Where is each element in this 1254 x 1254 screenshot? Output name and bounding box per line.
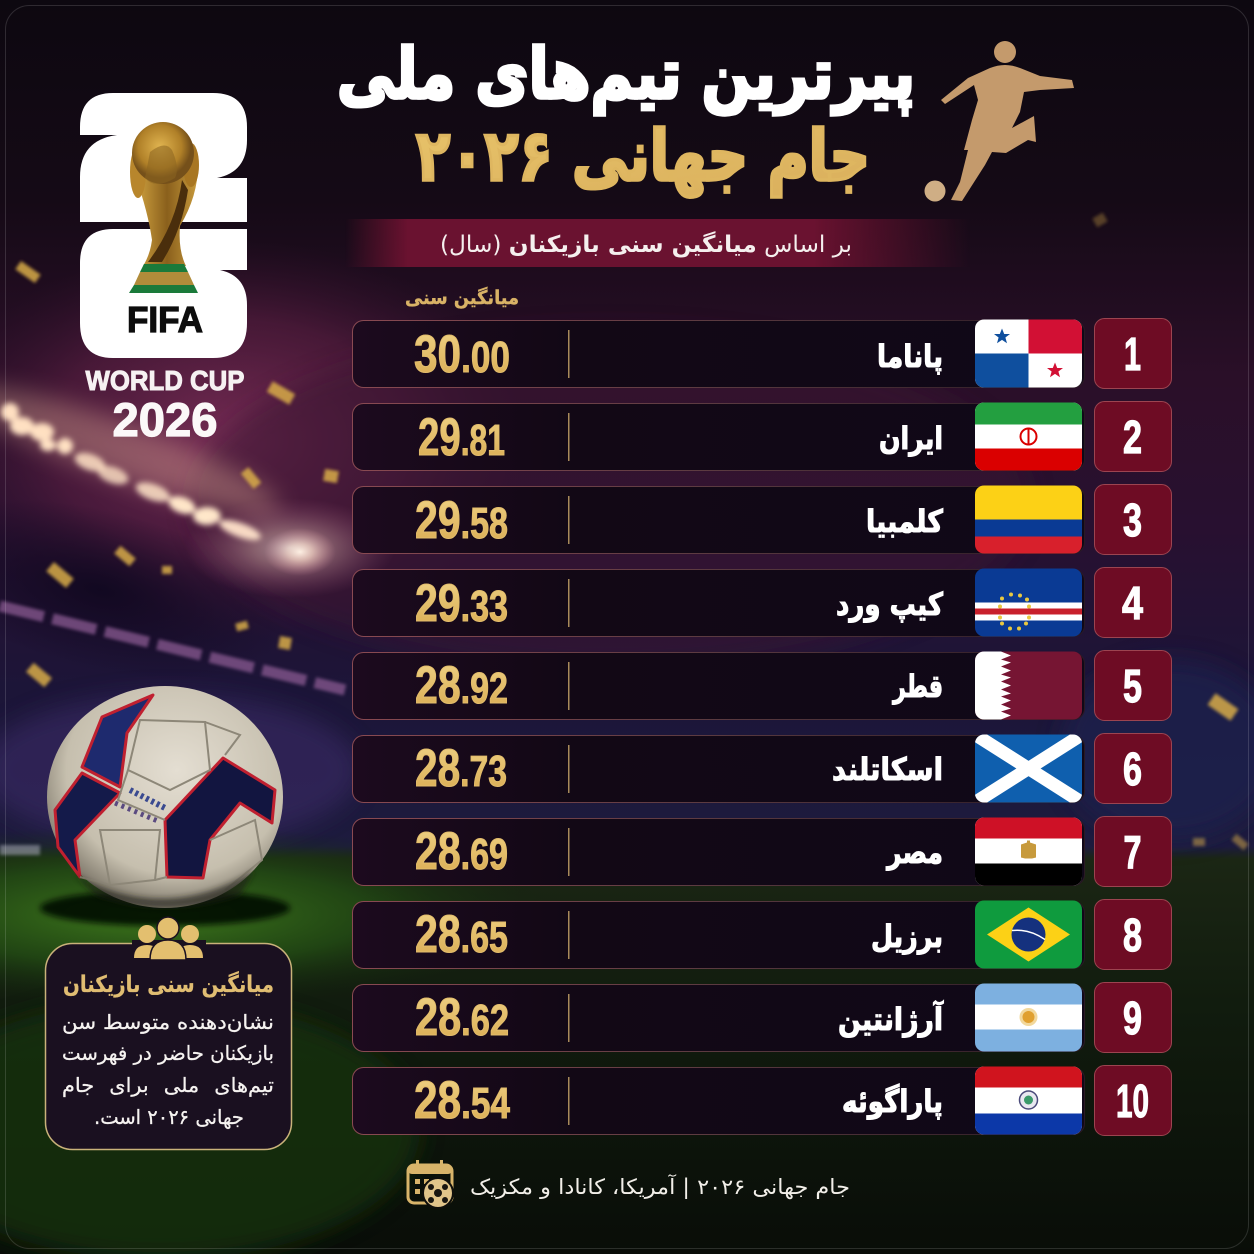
icon: football player silhouette <box>924 41 1074 202</box>
flag: Colombia <box>975 486 1082 554</box>
rank badge: 9 <box>1123 992 1142 1044</box>
value: 29.33 <box>415 574 508 633</box>
digit 6 <box>80 229 247 358</box>
country name: پاراگوئه <box>842 1083 943 1120</box>
value: 28.92 <box>415 656 508 715</box>
flag: Scotland <box>975 734 1082 802</box>
rank badge: 8 <box>1123 909 1142 961</box>
flag: Brazil <box>975 900 1082 968</box>
flag: Qatar <box>975 652 1082 720</box>
rank badge <box>1094 900 1172 970</box>
country name: اسکاتلند <box>832 752 943 788</box>
country name: کلمبیا <box>866 504 944 540</box>
rank badge <box>1094 734 1172 804</box>
row 3: Colombia <box>352 484 1172 554</box>
icon: calendar with ball <box>408 1160 453 1208</box>
title line 2: جام جهانی ۲۰۲۶ <box>416 115 870 198</box>
rank badge: 4 <box>1122 577 1143 629</box>
country name: ایران <box>879 421 943 457</box>
rank badge: 2 <box>1123 411 1142 463</box>
country name: کیپ ورد <box>836 587 944 623</box>
rank badge: 6 <box>1123 743 1142 795</box>
rank badge <box>1094 816 1172 886</box>
value: 28.73 <box>415 739 507 798</box>
row 9: Argentina <box>352 982 1172 1052</box>
value: 28.69 <box>415 822 508 881</box>
rank badge: 5 <box>1123 660 1142 712</box>
flag: Argentina <box>975 984 1082 1052</box>
callout: player average age explanation <box>46 917 292 1150</box>
flag: Cape Verde <box>975 568 1082 636</box>
row 4: Cape Verde <box>352 568 1172 638</box>
icon: three people <box>132 917 206 960</box>
flag: Panama <box>975 320 1082 388</box>
callout body text: جهانی ۲۰۲۶ است. <box>94 1105 244 1129</box>
callout heading: میانگین سنی بازیکنان <box>63 971 274 998</box>
title line 1: پیرترین تیم‌های ملی <box>337 33 915 116</box>
rank badge: 1 <box>1124 328 1141 380</box>
value: 30.00 <box>414 325 510 384</box>
rank badge: 7 <box>1124 826 1142 878</box>
rank badge <box>1094 318 1172 388</box>
row 8: Brazil <box>352 900 1172 970</box>
footer text: جام جهانی ۲۰۲۶ | آمریکا، کانادا و مکزیک <box>470 1174 850 1200</box>
row 6: Scotland <box>352 734 1172 804</box>
rank badge: 3 <box>1123 494 1142 546</box>
country name: قطر <box>892 669 943 705</box>
value: 29.58 <box>415 491 508 550</box>
callout body text: نشان‌دهنده متوسط سن <box>62 1010 274 1034</box>
value: 28.62 <box>415 988 509 1047</box>
flag: Paraguay <box>975 1066 1082 1134</box>
flag: Iran <box>975 402 1082 470</box>
subtitle band <box>345 219 970 267</box>
icon: world cup trophy <box>129 122 199 293</box>
FIFA wordmark: FIFA <box>127 299 203 340</box>
subtitle text: بر اساس میانگین سنی بازیکنان (سال) <box>440 231 852 258</box>
rank badge <box>1094 982 1172 1052</box>
value: 29.81 <box>418 408 505 467</box>
country name: آرژانتین <box>838 1000 944 1038</box>
2026 label: 2026 <box>112 393 218 446</box>
WORLD CUP label: WORLD CUP <box>86 365 244 396</box>
callout body text: تیم‌های ملی برای جام <box>62 1073 274 1097</box>
country name: برزیل <box>871 919 943 955</box>
rank badge <box>1094 568 1172 638</box>
value: 28.65 <box>415 905 508 964</box>
rank badge: 10 <box>1116 1075 1149 1127</box>
column heading: average age: میانگین سنی <box>405 286 519 309</box>
country name: مصر <box>885 835 943 871</box>
row 5: Qatar <box>352 650 1172 720</box>
logo: FIFA World Cup 26 <box>80 93 247 446</box>
soccer ball illustration <box>40 686 290 926</box>
row 2: Iran <box>352 402 1172 472</box>
callout body text: بازیکنان حاضر در فهرست <box>62 1041 274 1065</box>
rank badge <box>1094 1066 1172 1136</box>
row 7: Egypt <box>352 816 1172 886</box>
gold confetti <box>15 213 1249 850</box>
row 10: Paraguay <box>352 1066 1172 1136</box>
callout body text <box>62 1010 274 1129</box>
rank badge <box>1094 484 1172 554</box>
flag: Egypt <box>975 818 1082 886</box>
value: 28.54 <box>414 1071 510 1130</box>
country name: پاناما <box>877 339 943 375</box>
rank badge <box>1094 650 1172 720</box>
digit 2 <box>80 93 247 222</box>
rank badge <box>1094 402 1172 472</box>
row 1: Panama <box>352 318 1172 388</box>
